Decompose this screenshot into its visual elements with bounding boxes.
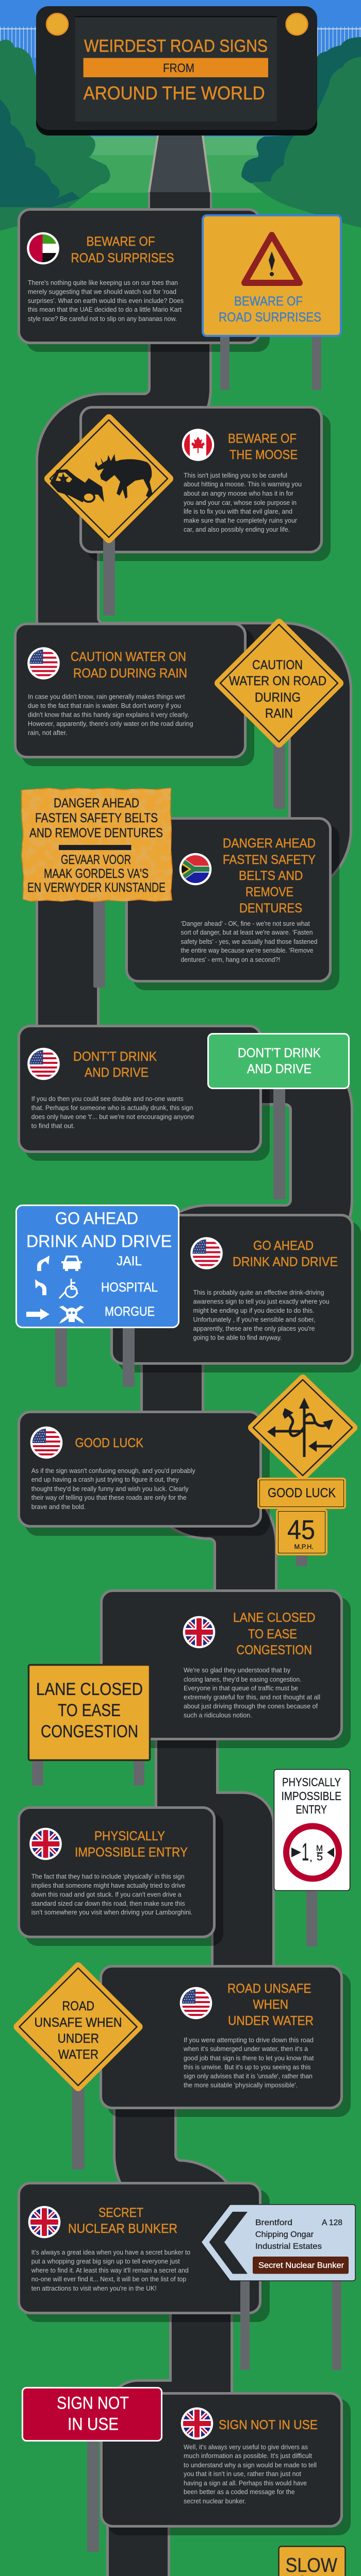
body text: thought they'd be really funny and wish you luck. Clearly <box>31 1485 189 1493</box>
sign: good luck stack: GOOD LUCK <box>268 1486 336 1500</box>
sign: beware of road surprises <box>203 215 341 390</box>
body text: surprises'. What on earth would this even include? Does <box>28 297 184 304</box>
panel: road unsafe <box>101 1966 351 2117</box>
body text: Unfortunately , if you're sensible and sober, <box>193 1316 316 1324</box>
heading: SIGN NOT IN USE <box>219 2418 318 2432</box>
sign: danger ahead rusty: AND REMOVE DENTURES <box>29 826 163 840</box>
body text: life is to fix you with that evil glare, and <box>184 508 292 515</box>
body text: does only have one 't'... but we're not encouraging anyone <box>31 1113 194 1121</box>
body text: going to be able to find anyway. <box>193 1334 282 1342</box>
icon: skull and crossbones <box>60 1306 84 1323</box>
panel: good luck <box>19 1412 270 1536</box>
heading <box>68 2206 177 2236</box>
sign: road unsafe diamond: UNDER <box>58 2031 99 2046</box>
flag: USA <box>180 1987 212 2019</box>
heading <box>75 1829 188 1860</box>
body text <box>184 472 302 533</box>
body text: It's always a great idea when you have a secret bunker to <box>31 2249 190 2256</box>
sign: sign not in use red: SIGN NOT <box>57 2394 129 2413</box>
body text: There's nothing quite like keeping us on our toes than <box>28 279 178 286</box>
flag: USA <box>27 647 60 680</box>
body text: been better as a coded message for the <box>184 2488 295 2496</box>
heading: TO EASE <box>248 1627 297 1641</box>
body text: the more suitable 'physically impossible'. <box>184 2081 298 2089</box>
body text: didn't know that as this handy sign explains it very clearly. <box>28 711 189 718</box>
body text: The fact that they had to include 'physically' in this sign <box>31 1873 185 1880</box>
body text: about an angry moose who has it in for <box>184 490 293 497</box>
heading: BELTS AND <box>239 869 303 883</box>
panel: go ahead drink and drive <box>111 1215 361 1372</box>
flag: UAE <box>27 232 59 264</box>
sign: secret nuclear bunker: Secret Nuclear Bunker <box>258 2261 344 2270</box>
body text: that. Perhaps for someone who is actually drunk, this sign <box>31 1105 193 1112</box>
icon: width limit roundel: M <box>316 1843 323 1853</box>
icon: width limit roundel <box>286 1826 339 1878</box>
heading: ROAD DURING RAIN <box>73 666 187 681</box>
sign: secret nuclear bunker: A 128 <box>322 2218 342 2227</box>
icon: arrow up right <box>37 1256 50 1271</box>
title <box>84 36 268 104</box>
sign: beware of road surprises: ROAD SURPRISES <box>219 310 321 325</box>
sign: moose diamond <box>48 418 169 616</box>
heading: ROAD SURPRISES <box>71 251 174 265</box>
flag: UK <box>28 2206 60 2238</box>
sign: danger ahead rusty: MAAK GORDELS VA'S <box>44 867 149 881</box>
title sign <box>36 6 317 135</box>
icon: confusing junction arrows <box>267 1398 333 1457</box>
body text: having a sign at all. Perhaps this would have <box>184 2480 307 2487</box>
heading: CAUTION WATER ON <box>71 650 186 664</box>
body text: Everyone in that queue of traffic must be <box>184 1685 298 1692</box>
trees left <box>0 40 110 231</box>
heading: DONT'T DRINK <box>73 1049 157 1064</box>
body text: the entire way because we're sensible. ‘Remove <box>180 947 314 954</box>
heading: DENTURES <box>239 901 302 916</box>
flag: UK <box>181 2408 213 2439</box>
body text <box>180 920 318 963</box>
heading <box>223 836 316 916</box>
body text: ‘Danger ahead’ - OK, fine - we're not sure what <box>180 920 310 927</box>
sign: caution water diamond: RAIN <box>265 706 293 721</box>
sign: go ahead blue <box>17 1206 178 1387</box>
sign: go ahead blue: HOSPITAL <box>101 1280 158 1295</box>
heading: FASTEN SAFETY <box>223 853 316 867</box>
body text: good job that sign is there to let you know that <box>184 2055 314 2062</box>
icon: width limit roundel: 5 <box>317 1851 323 1863</box>
icon: moose and wrecked car <box>50 454 153 502</box>
sign: lane closed: CONGESTION <box>41 1722 138 1741</box>
body text: secret nuclear bunker. <box>184 2498 246 2505</box>
sign: lane closed: LANE CLOSED <box>36 1680 143 1699</box>
sign: good luck stack <box>252 1379 353 1566</box>
body text: brave and the bold. <box>31 1503 86 1511</box>
sign: go ahead blue: JAIL <box>117 1254 142 1268</box>
body text: In case you didn't know, rain generally makes things wet <box>28 693 185 701</box>
heading: THE MOOSE <box>229 448 298 462</box>
flag: UK <box>29 1828 62 1860</box>
body text: rain, not after. <box>28 730 68 737</box>
body text: If you do then you could see double and no-one wants <box>31 1095 184 1103</box>
panel: beware of road surprises <box>19 209 270 352</box>
sign: good luck stack: 45 <box>287 1515 315 1546</box>
sign: slow children at play <box>278 2546 346 2576</box>
sign: dont't drink green: DONT'T DRINK <box>238 1046 321 1060</box>
body text <box>31 2249 190 2292</box>
body text: This isn't just telling you to be careful <box>184 472 287 479</box>
sign: caution water diamond: WATER ON ROAD <box>229 674 326 688</box>
heading: GOOD LUCK <box>75 1436 143 1450</box>
heading: WHEN <box>253 1997 288 2012</box>
body text <box>193 1289 330 1342</box>
heading: IMPOSSIBLE ENTRY <box>75 1845 188 1860</box>
body text: to find that out. <box>31 1122 75 1129</box>
body text: sign only advises that it is 'unsafe', rather than <box>184 2073 313 2080</box>
sign: secret nuclear bunker: Industrial Estates <box>255 2242 322 2251</box>
heading: REMOVE <box>245 885 293 900</box>
body text: dentures’ - erm, hang on a second?! <box>180 956 281 963</box>
body text: such a ridiculous notion. <box>184 1711 252 1719</box>
sign: caution water diamond <box>219 623 339 809</box>
body text: put a whopping great big sign up to tell everyone just <box>31 2258 180 2265</box>
panel: secret nuclear bunker <box>19 2183 270 2322</box>
sign: dont't drink green: AND DRIVE <box>247 1062 311 1076</box>
body text: However, apparently, there's only water on the road during <box>28 720 193 727</box>
body text: due to the fact that rain is water. But don't worry if you <box>28 702 181 709</box>
body text: where to find it. At least this way it'll remain a secret and <box>31 2267 189 2274</box>
icon: police car <box>61 1256 82 1271</box>
sign: road unsafe diamond: ROAD <box>62 1999 94 2013</box>
heading: ROAD UNSAFE <box>227 1981 311 1996</box>
heading: DANGER AHEAD <box>223 836 316 851</box>
trees right <box>241 37 361 228</box>
sign: physically impossible entry <box>274 1769 350 1946</box>
heading: AND DRIVE <box>85 1065 149 1080</box>
body text <box>183 2037 314 2089</box>
flag: USA <box>190 1237 223 1269</box>
heading: CONGESTION <box>236 1643 312 1657</box>
heading <box>233 1611 316 1657</box>
body text: when it's submerged under water, then it's a <box>183 2045 308 2053</box>
body text: you and your car, whose sole purpose in <box>184 499 297 506</box>
flag: Canada <box>182 429 214 461</box>
sign: lane closed: TO EASE <box>58 1701 121 1720</box>
sign: danger ahead rusty: EN VERWYDER KUNSTANDE <box>27 880 166 895</box>
body text: this mean that the UAE decided to do a little Mario Kart <box>28 306 182 313</box>
heading <box>227 1981 314 2028</box>
body text: about just driving through the cones because of <box>184 1703 318 1710</box>
heading: NUCLEAR BUNKER <box>68 2222 177 2236</box>
body text <box>28 279 184 323</box>
sign: secret nuclear bunker <box>201 2205 355 2370</box>
body text: you that it isn't in use, rather than just not <box>184 2470 302 2478</box>
body text: make sure that he completely ruins your <box>184 517 297 524</box>
flag: USA <box>27 1048 60 1080</box>
panel: sign not in use <box>101 2394 351 2535</box>
panel: physically impossible entry <box>19 1807 223 1946</box>
sign: sign not in use red <box>23 2387 162 2552</box>
body text: end up having a crash just trying to figure it out, they <box>31 1476 179 1483</box>
icon: width limit roundel: , <box>309 1853 313 1863</box>
heading <box>71 650 187 681</box>
sign: slow children at play: SLOW <box>286 2554 337 2576</box>
sign: sign not in use red: IN USE <box>68 2414 119 2434</box>
icon: running child <box>293 2576 333 2577</box>
sign: physically impossible entry: ENTRY <box>296 1803 327 1816</box>
sign: go ahead blue: DRINK AND DRIVE <box>26 1231 172 1251</box>
heading: LANE CLOSED <box>233 1611 316 1625</box>
heading: BEWARE OF <box>228 432 297 446</box>
body text <box>31 1873 192 1916</box>
body text: ten attractions to visit when you're in the UK! <box>31 2285 157 2292</box>
sign: danger ahead rusty: FASTEN SAFETY BELTS <box>35 811 158 825</box>
body text: much information as possible. It's just difficult <box>184 2452 313 2460</box>
body text: As if the sign wasn't confusing enough, and you'd probably <box>31 1467 195 1475</box>
heading <box>73 1049 157 1080</box>
icon: width limit roundel: 1 <box>302 1839 309 1866</box>
body text: about hitting a moose. This is warning you <box>184 481 302 488</box>
sign: physically impossible entry: PHYSICALLY <box>282 1775 341 1789</box>
body text: implies that someone might have actually tried to drive <box>31 1882 185 1889</box>
sign: road unsafe diamond: WATER <box>58 2047 99 2062</box>
sign: road unsafe diamond: UNSAFE WHEN <box>34 2015 122 2030</box>
heading: UNDER WATER <box>228 2013 314 2028</box>
flag: South Africa <box>179 853 211 885</box>
sign: secret nuclear bunker: Chipping Ongar <box>255 2230 314 2239</box>
sign: go ahead blue: MORGUE <box>105 1304 155 1319</box>
body text <box>31 1095 194 1129</box>
body text: standard sized car down this road, then make sure this <box>31 1900 185 1907</box>
sign: caution water diamond: CAUTION <box>252 658 303 672</box>
flag: USA <box>30 1427 62 1459</box>
body text: merely suggesting that we should watch out for 'road <box>28 289 176 296</box>
body text: apparently, these are the only places you're <box>193 1325 315 1332</box>
body text: no-one will ever find it... Next, it will be on the list of top <box>31 2276 186 2283</box>
icon: arrow up left <box>35 1279 46 1295</box>
body text: might be ending up if you decide to do this. <box>193 1307 315 1314</box>
sign: danger ahead rusty: DANGER AHEAD <box>54 796 139 810</box>
heading <box>71 234 174 265</box>
winding road <box>35 135 321 2576</box>
sign: physically impossible entry: IMPOSSIBLE <box>282 1789 341 1803</box>
body text <box>184 2444 317 2505</box>
panel: lane closed <box>101 1591 351 1748</box>
sign: secret nuclear bunker: Brentford <box>255 2218 292 2227</box>
heading <box>233 1239 338 1269</box>
body text: Well, it's always very useful to give drivers as <box>184 2444 308 2451</box>
body text: extremely grateful for this, and not thought at all <box>184 1694 320 1701</box>
sign: danger ahead rusty: GEVAAR VOOR <box>61 853 131 867</box>
sign lamps <box>46 13 307 35</box>
heading: DRINK AND DRIVE <box>233 1255 338 1269</box>
icon: wheelchair <box>59 1279 77 1298</box>
body text <box>31 1467 195 1511</box>
heading <box>228 432 298 462</box>
body text <box>28 693 193 737</box>
sign: go ahead blue: GO AHEAD <box>55 1209 138 1228</box>
icon: warning triangle <box>244 235 300 283</box>
body text: this is unwise. But it's up to you seeing as this <box>184 2064 310 2071</box>
body text: to understand why a sign would be made to tell <box>184 2462 317 2469</box>
body text: sort of danger, but at least we're aware. ‘Fasten <box>180 929 313 936</box>
sign: caution water diamond: DURING <box>255 690 301 705</box>
sign: danger ahead rusty <box>22 788 172 988</box>
body text: awareness sign to tell you just exactly where you <box>193 1298 330 1306</box>
body text: If you were attempting to drive down this road <box>184 2037 314 2044</box>
body text: safety belts’ - yes, we actually had those fastened <box>180 938 318 945</box>
icon: right arrow <box>26 1309 50 1320</box>
title: AROUND THE WORLD <box>84 82 265 104</box>
heading: SECRET <box>99 2206 143 2220</box>
title: FROM <box>163 61 194 75</box>
body text: We're so glad they understood that by <box>184 1667 291 1674</box>
sign: road unsafe diamond <box>18 1967 138 2170</box>
sign: lane closed <box>29 1665 150 1786</box>
body text: down this road and got stuck. If you can't even drive a <box>31 1891 182 1898</box>
panel: beware of the moose <box>80 407 331 561</box>
heading: BEWARE OF <box>87 234 155 249</box>
title: WEIRDEST ROAD SIGNS <box>84 36 268 56</box>
body text: their way of telling you that these roads are only for the <box>31 1494 187 1501</box>
body text: This is probably quite an effective drink-driving <box>193 1289 324 1296</box>
panel: caution water on road <box>15 624 254 766</box>
panel: danger ahead <box>127 818 339 990</box>
heading: PHYSICALLY <box>94 1829 165 1843</box>
sign: beware of road surprises: BEWARE OF <box>234 294 303 309</box>
body text: closing lanes, they'd be easing congestion. <box>184 1676 301 1683</box>
flag: UK <box>183 1616 215 1648</box>
sign: dont't drink green <box>208 1033 349 1199</box>
body text <box>184 1667 320 1719</box>
sign: good luck stack: M.P.H. <box>294 1543 314 1551</box>
body text: car, and also possibly ending your life. <box>184 526 290 533</box>
body text: isn't somewhere you visit when driving your Lamborghini. <box>31 1909 192 1916</box>
body text: style race? Be careful not to slip on any bananas now. <box>28 315 177 323</box>
panel: dont't drink and drive <box>19 1026 270 1161</box>
heading: GO AHEAD <box>253 1239 314 1253</box>
